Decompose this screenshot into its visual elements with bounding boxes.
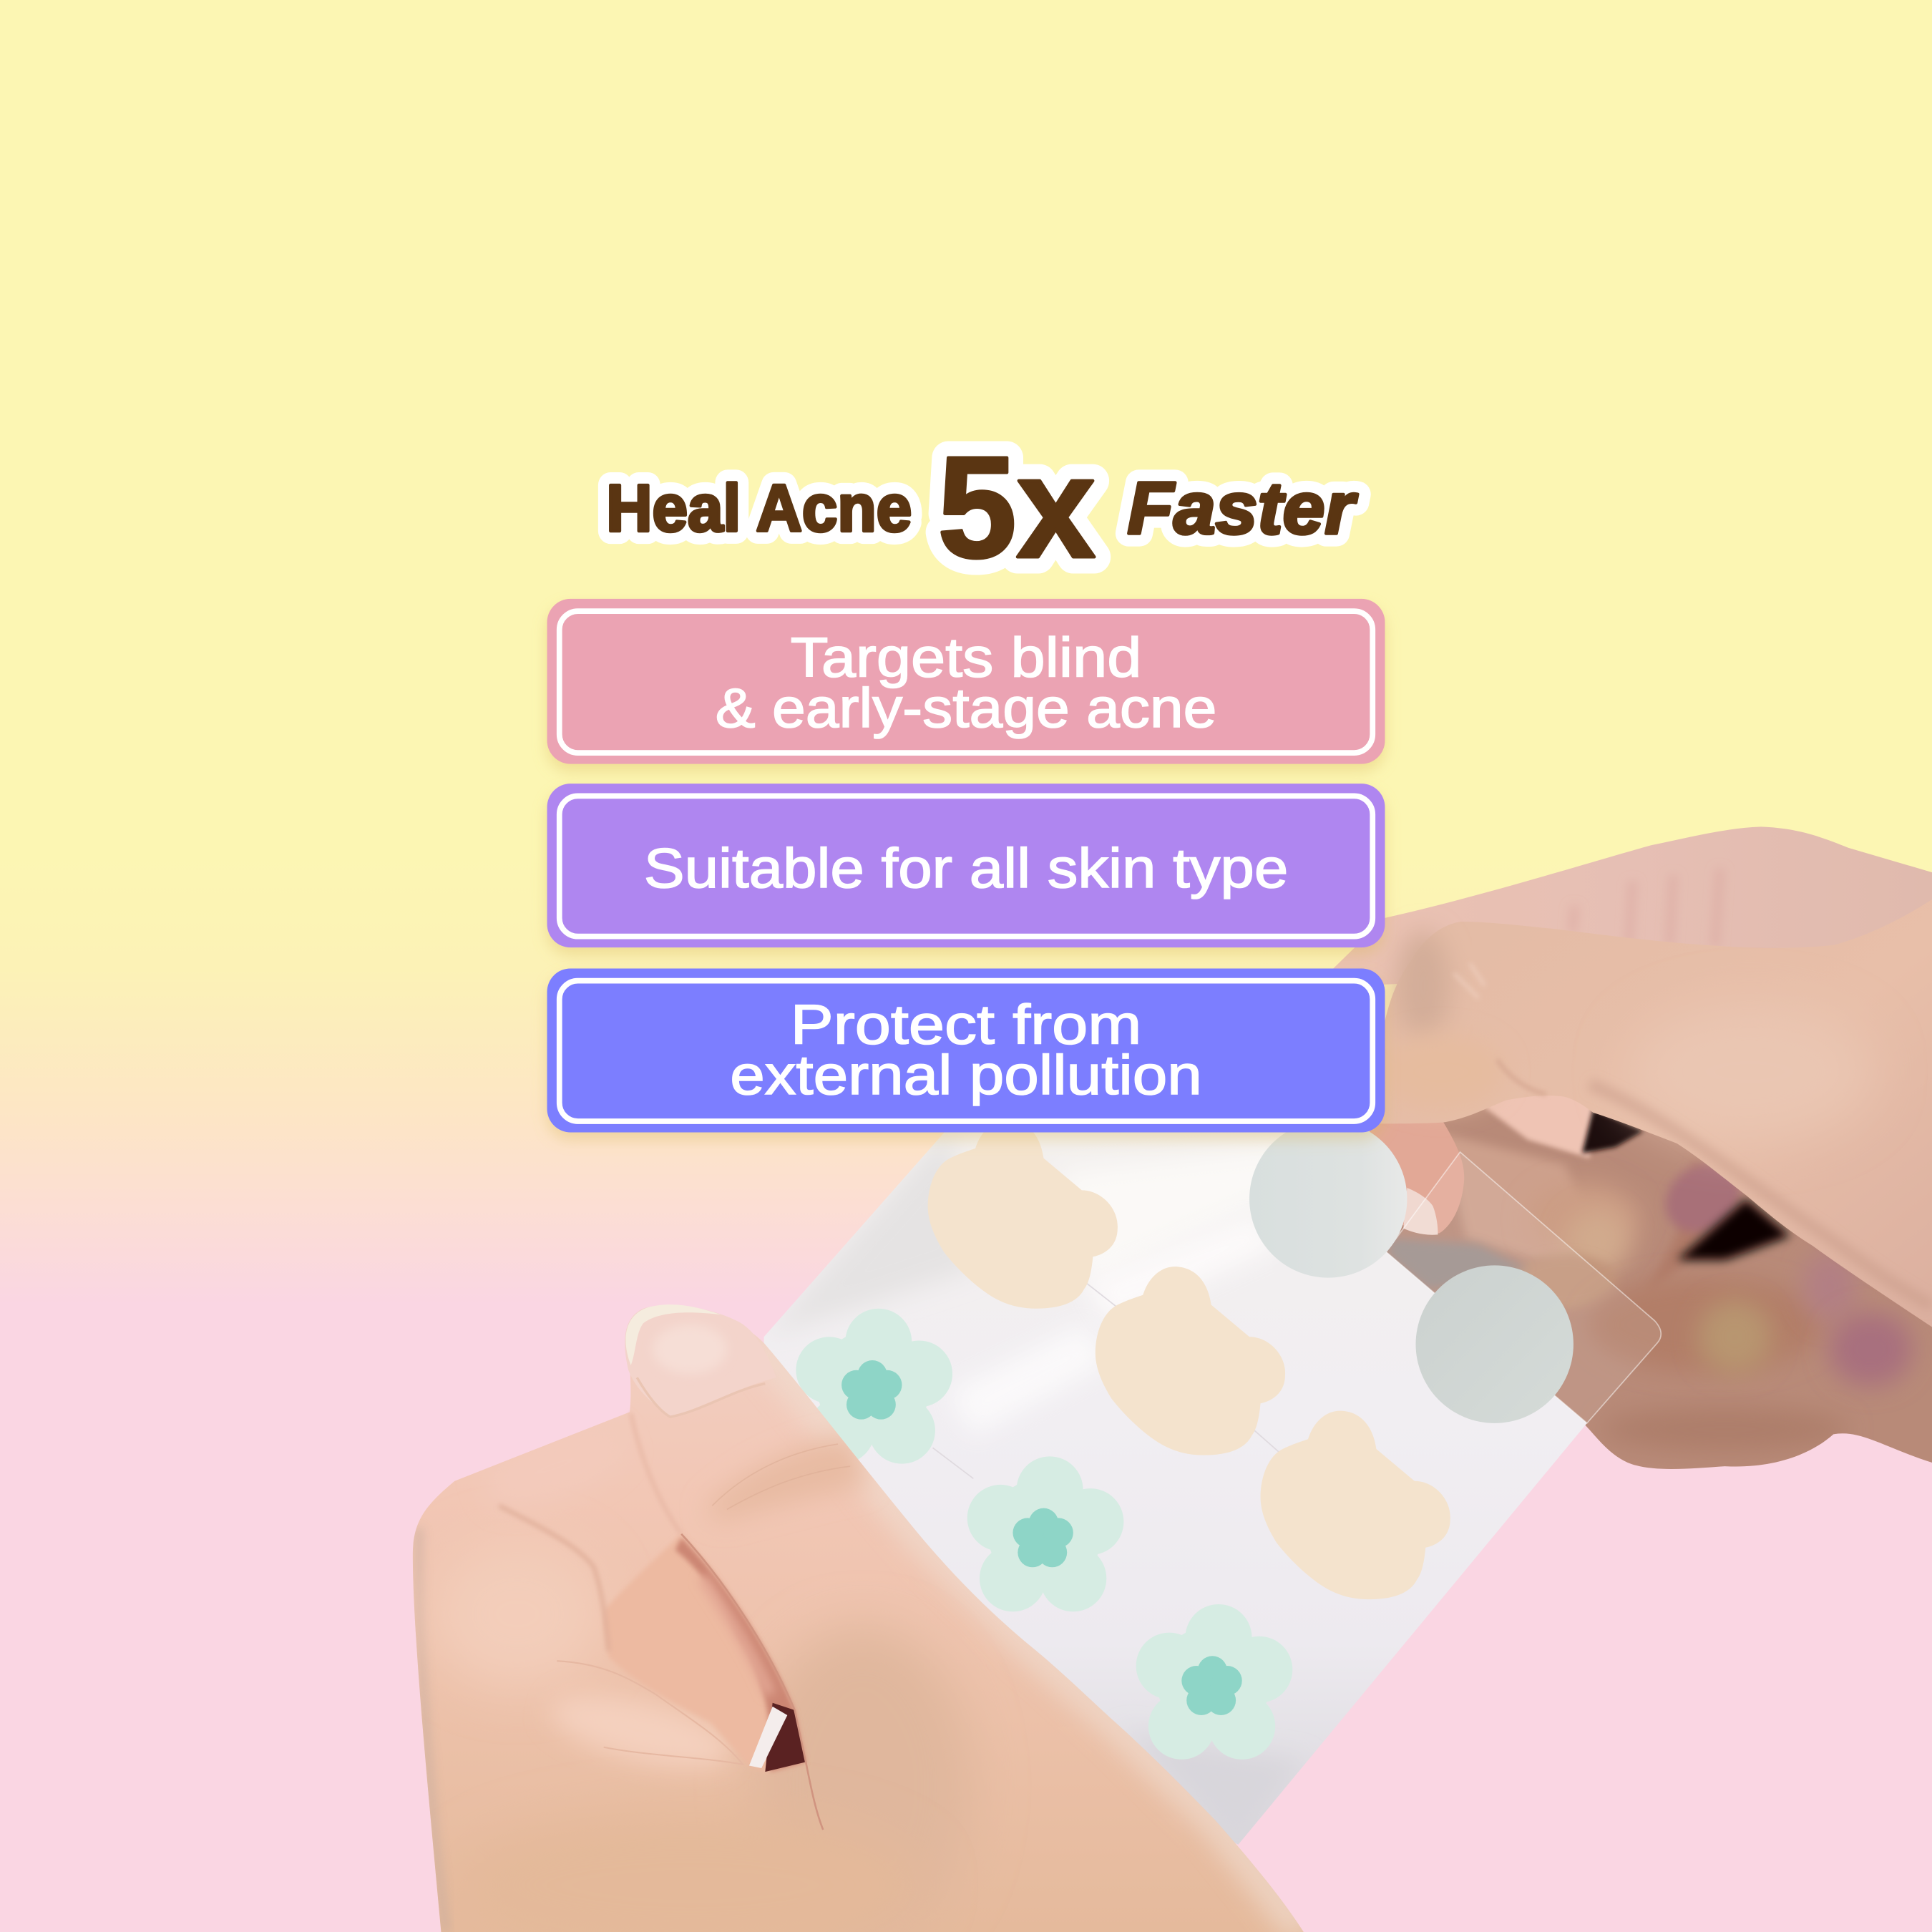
title outline: Heal Acne xyxy=(606,471,912,545)
bear patch 2 xyxy=(1096,1267,1285,1455)
left hand xyxy=(413,1304,1304,1932)
finger crease and pocket xyxy=(499,1413,823,1830)
flower patch 2 xyxy=(967,1456,1123,1611)
title: Heal Acne 5x Faster xyxy=(606,426,1357,587)
bear patch 1 xyxy=(928,1120,1118,1309)
right hand: middle fingertip and nail xyxy=(1367,1115,1464,1235)
title words: Heal Acne xyxy=(606,471,912,545)
panel: targets blind xyxy=(547,599,1385,764)
title words: 5x xyxy=(937,426,1096,587)
bear patch 3 xyxy=(1261,1411,1450,1599)
panel: external pollution xyxy=(547,968,1385,1132)
panel: acne patch sheet xyxy=(764,1120,1661,1845)
panel: external pollution: external pollution xyxy=(730,1045,1202,1106)
right hand: back fingers xyxy=(1328,826,1932,1469)
title words: Faster xyxy=(1128,467,1357,550)
panel: external pollution: Protect from xyxy=(791,994,1141,1055)
round clear patch 1 xyxy=(1249,1120,1407,1278)
title words xyxy=(606,426,1357,587)
panel: targets blind: Targets blind xyxy=(791,627,1141,688)
right hand: thumb xyxy=(1377,899,1932,1327)
title outline: 5x xyxy=(937,426,1096,587)
panel: targets blind: & early-stage acne xyxy=(716,678,1216,739)
panel: all skin type xyxy=(547,784,1385,947)
flower patch 1 xyxy=(796,1309,952,1464)
thumbnail xyxy=(625,1304,776,1417)
flower patch 3 xyxy=(1136,1604,1292,1760)
panel: all skin type: Suitable for all skin type xyxy=(644,838,1288,899)
title outline xyxy=(606,426,1357,587)
title outline: Faster xyxy=(1128,467,1357,550)
round clear patch 2 xyxy=(1416,1265,1574,1423)
